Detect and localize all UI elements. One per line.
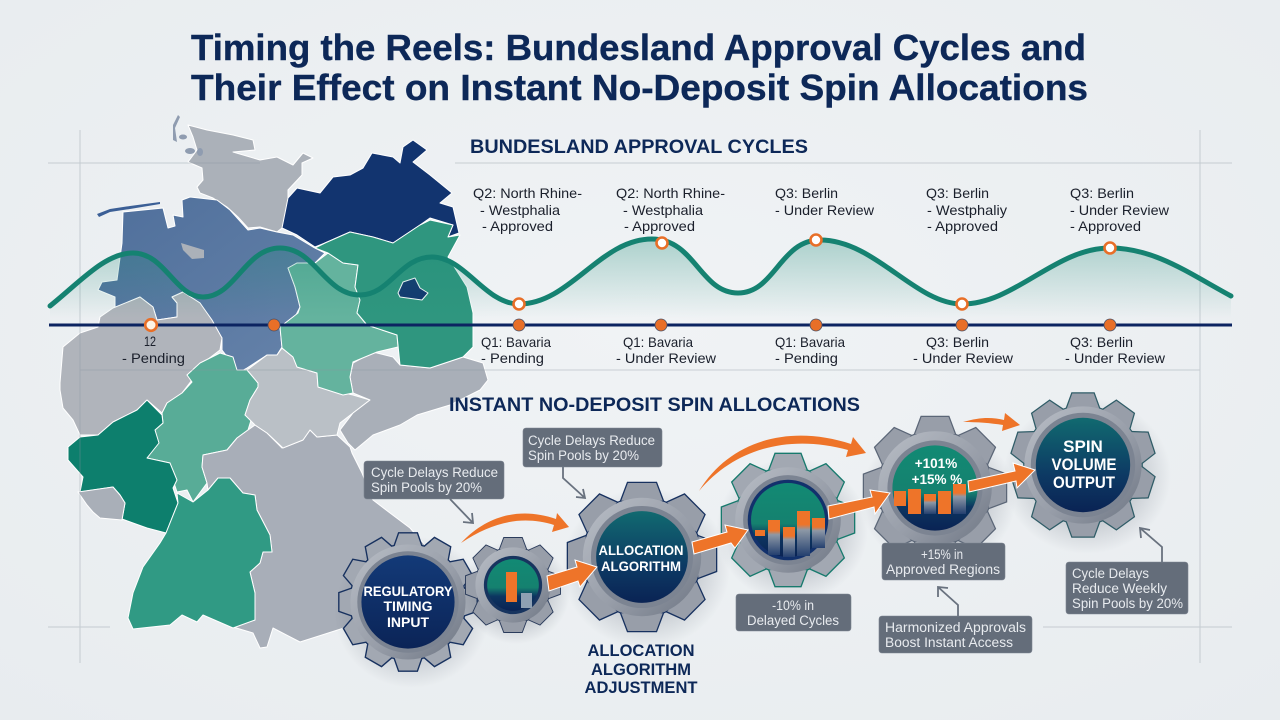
labels above the wave: Q2: North Rhine- [616, 185, 725, 201]
callout: approved regions [882, 543, 1005, 580]
labels above the wave: - Approved [927, 218, 998, 234]
caption: allocation algorithm adjustment [584, 641, 698, 697]
state: Lower Saxony [98, 197, 325, 373]
heading: Instant no-deposit spin allocations: INSTANT NO-DEPOSIT SPIN ALLOCATIONS [449, 394, 860, 416]
grid lines [48, 130, 1232, 663]
labels below the axis: Q1: Bavaria [775, 334, 845, 350]
gear: delayed cycles bars [716, 454, 868, 602]
callout: cycle delays 2 [523, 428, 662, 498]
bars [755, 530, 765, 536]
gear: allocation algorithm [562, 483, 730, 648]
callout: delayed cycles: -10% in [772, 598, 814, 613]
labels above the wave: - Westphaliy [927, 202, 1007, 218]
labels below the axis: - Pending [775, 350, 838, 366]
arrow: straight 4 [968, 463, 1035, 492]
state: North Rhine-Westphalia [60, 292, 222, 435]
labels below the axis: Q1: Bavaria [481, 334, 551, 350]
timeline markers [268, 319, 1116, 331]
gear: allocation algorithm: ALGORITHM [601, 558, 681, 574]
gear: regulatory timing input: INPUT [387, 614, 429, 630]
labels above the wave: - Under Review [775, 202, 875, 218]
islands [97, 115, 204, 259]
callout: cycle delays 1: Cycle Delays Reduce [371, 465, 498, 480]
gear: approved regions bars: +101% [915, 456, 957, 471]
labels above the wave: Q2: North Rhine- [473, 185, 582, 201]
gear: regulatory timing input [334, 534, 490, 688]
labels above the wave: - Westphalia [623, 202, 703, 218]
labels above the wave: - Approved [624, 218, 695, 234]
callout: harmonized approvals: Harmonized Approvals [885, 620, 1026, 635]
arrow: curved 2 [699, 436, 866, 491]
title: Their Effect on Instant No-Deposit Spin Allocations [191, 67, 1088, 108]
area under wave [50, 239, 1231, 325]
callout: weekly spin pools: Spin Pools by 20% [1072, 596, 1183, 611]
state: Baden-Wuerttemberg [128, 478, 272, 629]
gear: regulatory timing input: TIMING [384, 598, 433, 614]
callout: weekly spin pools: Reduce Weekly [1072, 581, 1167, 596]
caption: allocation algorithm adjustment: ALLOCATION [588, 641, 694, 660]
state: Rhineland-Palatinate [68, 400, 178, 533]
labels above the wave [473, 185, 1170, 234]
labels below the axis: Q1: Bavaria [623, 334, 693, 350]
title: Timing the Reels: Bundesland Approval Cycles and [191, 27, 1086, 68]
labels below the axis: Q3: Berlin [1070, 334, 1133, 350]
callout: harmonized approvals [879, 587, 1032, 653]
labels above the wave: Q3: Berlin [775, 185, 838, 201]
callout: delayed cycles [736, 594, 851, 631]
labels above the wave: - Under Review [1070, 202, 1170, 218]
state: Saxony-Anhalt [280, 253, 398, 395]
callout: weekly spin pools [1066, 528, 1188, 614]
labels below the axis: Q3: Berlin [926, 334, 989, 350]
wave markers [145, 234, 1115, 331]
state: Brandenburg [315, 220, 473, 368]
state: Hesse [147, 353, 258, 502]
gear: small bar chart gear [462, 538, 570, 644]
approval wave chart [49, 234, 1232, 331]
callout: cycle delays 2: Cycle Delays Reduce [528, 433, 655, 448]
gear: allocation algorithm: ALLOCATION [598, 542, 684, 558]
state: Bavaria [202, 425, 425, 648]
labels below the axis: - Pending [481, 350, 544, 366]
gear: regulatory timing input: REGULATORY [364, 583, 453, 599]
labels below the axis: - Under Review [913, 350, 1014, 366]
callout: approved regions: +15% in [921, 547, 963, 562]
state: Saarland [78, 487, 125, 520]
arrow: curved 3 [963, 413, 1020, 431]
callout: cycle delays 2: Spin Pools by 20% [528, 448, 639, 463]
state: Berlin [398, 278, 428, 300]
state: Schleswig-Holstein and Hamburg [188, 125, 313, 232]
labels below the axis: 12 [144, 333, 156, 349]
map of German states [60, 115, 488, 648]
state: Saxony [340, 352, 488, 450]
arrow: straight 3 [828, 490, 890, 519]
title [191, 27, 1088, 108]
mini bars [506, 572, 517, 602]
labels above the wave: Q3: Berlin [1070, 185, 1134, 201]
labels above the wave: - Westphalia [480, 202, 560, 218]
gear: spin volume output: SPIN [1063, 437, 1103, 456]
arrow: straight 2 [692, 525, 748, 554]
timeline axis [49, 324, 1232, 326]
gear: spin volume output: OUTPUT [1053, 473, 1116, 492]
labels below the axis: - Under Review [616, 350, 717, 366]
arrow: curved 1 [461, 513, 569, 543]
state: Thuringia [245, 348, 370, 448]
caption: allocation algorithm adjustment: ADJUSTMENT [584, 678, 698, 697]
callout: cycle delays 1: Spin Pools by 20% [371, 480, 482, 495]
wave line [50, 239, 1231, 306]
callout: harmonized approvals: Boost Instant Access [885, 635, 1013, 650]
callout: weekly spin pools: Cycle Delays [1072, 566, 1149, 581]
gear: approved regions bars: +15% % [912, 472, 962, 487]
callout: cycle delays 1 [364, 461, 504, 523]
callout: approved regions: Approved Regions [886, 562, 1000, 577]
callout: delayed cycles: Delayed Cycles [747, 613, 839, 628]
arrow: straight 1 [547, 560, 597, 591]
caption: allocation algorithm adjustment: ALGORITHM [591, 660, 691, 679]
heading: Bundesland approval cycles: BUNDESLAND APPROVAL CYCLES [470, 137, 808, 158]
gear: approved regions bars [860, 417, 1016, 570]
labels above the wave: Q3: Berlin [926, 185, 989, 201]
gear: spin volume output [1003, 394, 1171, 554]
gear: spin volume output: VOLUME [1052, 455, 1116, 474]
labels above the wave: - Approved [482, 218, 553, 234]
labels below the axis: - Pending [122, 350, 185, 366]
bars [894, 491, 906, 506]
labels above the wave: - Approved [1070, 218, 1141, 234]
state: Mecklenburg-Vorpommern [282, 140, 459, 247]
labels below the axis [122, 333, 1166, 366]
labels below the axis: - Under Review [1065, 350, 1166, 366]
